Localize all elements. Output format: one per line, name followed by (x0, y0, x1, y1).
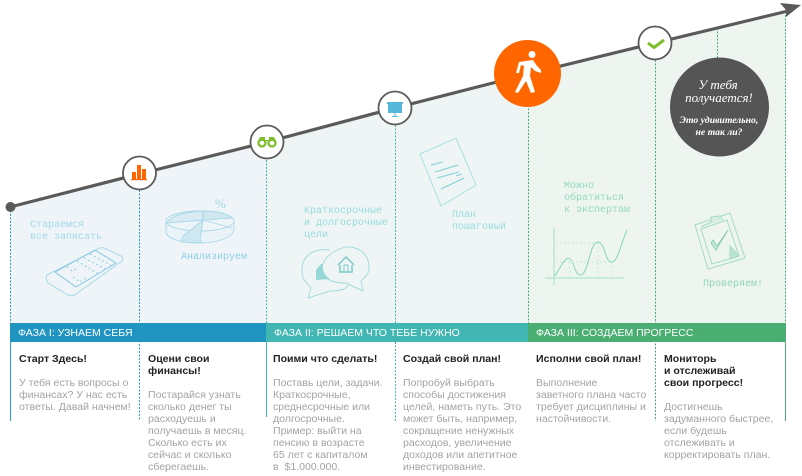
illustration: clipboard with check (695, 213, 745, 269)
text: create your plan (403, 353, 521, 473)
text: monitor progress: корректировать план. (664, 449, 770, 461)
header: phase 3: ФАЗА III: СОЗДАЕМ ПРОГРЕСС (536, 327, 693, 339)
text: create your plan: расходов, увеличение (403, 437, 512, 449)
text: understand what to do: Пример: выйти на (273, 425, 362, 437)
text: create your plan: Попробуй выбрать (403, 377, 495, 389)
label: step by step plan: План (452, 210, 476, 221)
text: execute your plan: требует дисциплины и (536, 401, 646, 413)
header: phase 2 (266, 323, 529, 342)
text: understand what to do: пенсию в возрасте (273, 437, 365, 449)
text: assess finances: расходуешь и (148, 413, 216, 425)
header: phase 1 (10, 323, 267, 342)
text: create your plan: может быть, например, (403, 413, 517, 425)
label: consult experts: обратиться (564, 193, 624, 204)
panel: phase 1 background (10, 142, 267, 323)
illustration: smartphone (46, 248, 123, 296)
text: start here (19, 353, 131, 413)
icon: bar chart milestone (123, 156, 156, 190)
text: assess finances: сколько денег ты (148, 401, 232, 413)
text: start here: Старт Здесь! (19, 353, 87, 365)
label: consult experts: Можно (564, 181, 594, 192)
label: consult experts (564, 181, 630, 216)
text: understand what to do: Поими что сделать! (273, 353, 377, 365)
text: understand what to do: в $1.000.000. (273, 461, 340, 473)
text: assess finances: сейчас и сколько (148, 449, 231, 461)
text: start here: финансах? У нас есть (19, 389, 127, 401)
label: short and long term goals (304, 206, 388, 241)
text: monitor progress: отслеживать и (664, 437, 735, 449)
icon: binoculars milestone (250, 126, 284, 158)
text: execute your plan: настойчивости. (536, 413, 611, 425)
callout circle (670, 58, 769, 156)
header: phase 1: ФАЗА I: УЗНАЕМ СЕБЯ (18, 327, 133, 339)
label: percent sign: % (215, 196, 226, 211)
text: start here: У тебя есть вопросы о (19, 377, 128, 389)
illustration: line graph (545, 228, 627, 285)
callout circle: не так ли? (695, 127, 743, 138)
text: create your plan: сокращение ненужных (403, 425, 514, 437)
text: monitor progress: Достигнешь (664, 401, 723, 413)
label: verify: Проверяем! (703, 279, 763, 290)
text: execute your plan: Исполни свой план! (536, 353, 641, 365)
text: create your plan: инвестирование. (403, 461, 486, 473)
text: execute your plan: заветного плана часто (536, 389, 646, 401)
label: consult experts: к экспертам (564, 205, 630, 216)
text: understand what to do: 65 лет с капиталом (273, 449, 368, 461)
text: monitor progress: Мониторь (664, 353, 716, 365)
text: understand what to do: Краткосрочные, (273, 389, 351, 401)
text: assess finances: финансы! (148, 365, 201, 377)
label: write everything down: все записать (30, 232, 102, 243)
growth line arrow (6, 3, 801, 212)
label: step by step plan: пошаговый (452, 222, 506, 233)
text: assess finances: получаешь в месяц. (148, 425, 246, 437)
icon: check mark milestone (638, 26, 672, 60)
label: write everything down (30, 220, 102, 243)
icon: presentation board milestone (378, 92, 412, 124)
header: phase 3 (528, 323, 786, 342)
text: monitor progress: свои прогресс! (664, 377, 743, 389)
text: assess finances: сберегаешь. (148, 461, 209, 473)
text: monitor progress: и отслеживай (664, 365, 735, 377)
callout circle: Это удивительно, (680, 115, 758, 126)
text: understand what to do: Поставь цели, задачи. (273, 377, 382, 389)
text: create your plan: Создай свой план! (403, 353, 501, 365)
text: create your plan: целей, наметь путь. Это (403, 401, 521, 413)
text: create your plan: доходов или апетитное (403, 449, 517, 461)
panel: phase 2 background (267, 72, 528, 323)
label: analyze: Анализируем (181, 252, 247, 263)
text: assess finances: Сколько есть их (148, 437, 227, 449)
text: execute your plan (536, 353, 646, 425)
label: write everything down: Стараемся (30, 220, 84, 231)
header: phase 2: ФАЗА II: РЕШАЕМ ЧТО ТЕБЕ НУЖНО (274, 327, 460, 339)
text: monitor progress: задуманного быстрее, (664, 413, 773, 425)
text: understand what to do: долгосрочные. (273, 413, 345, 425)
text: create your plan: способы достижения (403, 389, 506, 401)
callout circle: У тебя (698, 77, 738, 92)
text: assess finances: Постарайся узнать (148, 389, 241, 401)
text: assess finances (148, 353, 246, 473)
label: short and long term goals: цели (304, 230, 328, 241)
panel: phase 3 background (528, 11, 786, 323)
callout circle: получается! (685, 90, 753, 105)
text: monitor progress: если будешь (664, 425, 727, 437)
label: step by step plan (452, 210, 506, 233)
text: assess finances: Оцени свои (148, 353, 209, 365)
illustration: speech bubbles with car and house (302, 247, 369, 298)
text: understand what to do: среднесрочные или (273, 401, 370, 413)
text: start here: ответы. Давай начнем! (19, 401, 131, 413)
text: execute your plan: Выполнение (536, 377, 597, 389)
illustration: document page (420, 138, 476, 206)
label: short and long term goals: и долгосрочные (304, 218, 388, 229)
label: short and long term goals: Краткосрочные (304, 206, 382, 217)
text: understand what to do (273, 353, 382, 473)
icon: walking person milestone (494, 40, 561, 107)
text: monitor progress (664, 353, 773, 461)
illustration: pie chart (166, 211, 234, 243)
